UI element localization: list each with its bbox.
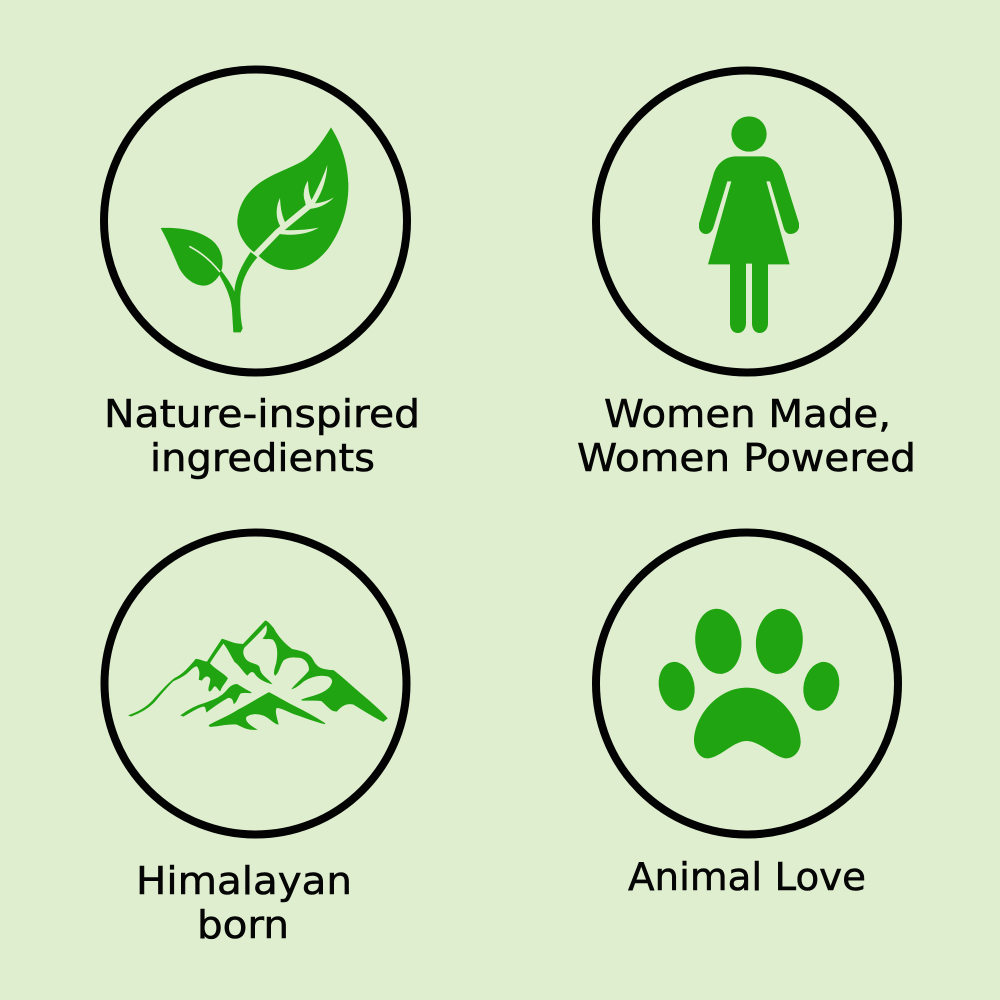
panel: himalayan born <box>104 532 406 947</box>
label: women made, women powered <box>577 392 916 480</box>
label: women made, women powered: Women Made, <box>604 392 891 436</box>
icon: woman figure <box>699 116 799 333</box>
label: himalayan born: Himalayan <box>136 859 352 903</box>
label: nature-inspired ingredients: ingredients <box>150 436 375 480</box>
circle outline: mountain <box>104 532 406 834</box>
label: animal love: Animal Love <box>628 855 866 899</box>
icon: paw print <box>654 606 844 758</box>
circle outline: paw <box>596 532 898 834</box>
panel: women made, women powered <box>577 70 916 480</box>
panel: animal love <box>596 532 898 899</box>
panel: nature-inspired ingredients <box>104 70 420 480</box>
icon: mountains <box>129 621 387 729</box>
icon: leaf sprout <box>161 127 348 332</box>
label: himalayan born: born <box>197 903 289 947</box>
circle outline: woman <box>596 70 898 372</box>
label: nature-inspired ingredients <box>104 392 420 480</box>
label: women made, women powered: Women Powered <box>577 436 916 480</box>
label: nature-inspired ingredients: Nature-inspired <box>104 392 420 436</box>
circle outline: leaf <box>104 70 407 372</box>
label: himalayan born <box>136 859 352 947</box>
